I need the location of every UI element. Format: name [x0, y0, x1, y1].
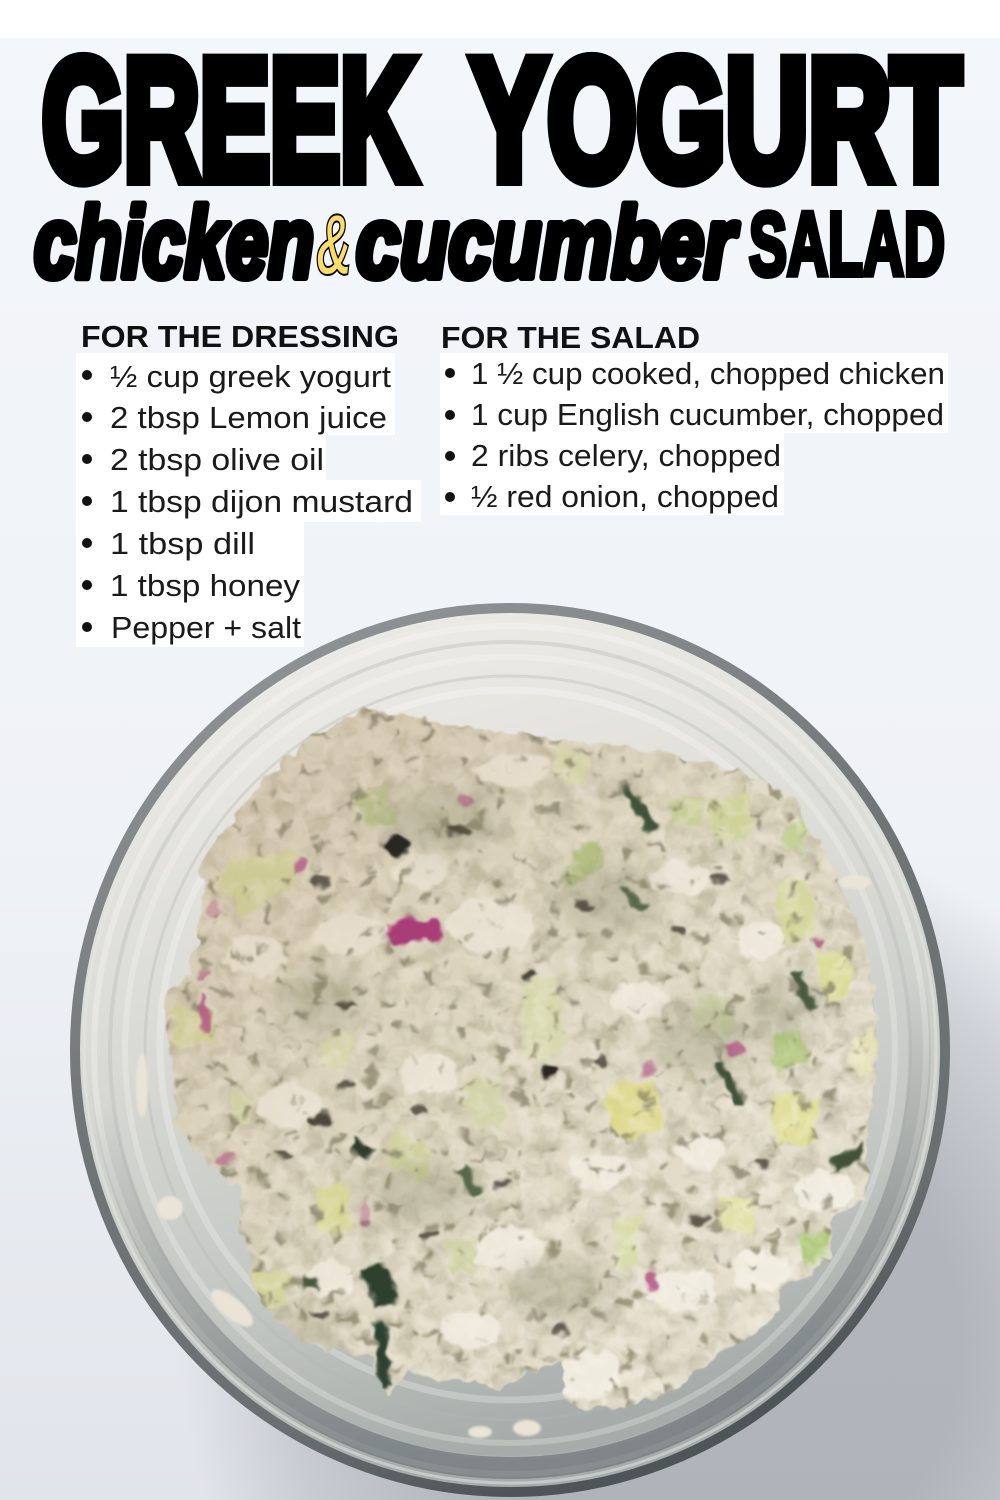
subtitle line: chicken & cucumber salad [34, 187, 945, 299]
crevices [276, 824, 770, 1335]
list: salad items: 1 ½ cup cooked, chopped chicken [471, 356, 945, 391]
script word: cucumber: cucumber [356, 187, 739, 299]
list: salad items: 2 ribs celery, chopped [471, 438, 781, 473]
stray dressing on glass [136, 875, 871, 1438]
ampersand: & [316, 197, 352, 293]
list: dressing items: 2 tbsp Lemon juice [110, 400, 387, 435]
salad mass [150, 700, 890, 1430]
panel: salad ingredients [440, 320, 948, 515]
title word: GREEK: GREEK [42, 24, 416, 216]
title [34, 24, 961, 299]
list: salad items: 1 cup English cucumber, chopped [471, 397, 944, 432]
panel: dressing ingredients [76, 319, 421, 647]
list: dressing items: Pepper + salt [111, 610, 301, 645]
list: dressing items: 1 tbsp dill [110, 526, 255, 561]
list: dressing items: 2 tbsp olive oil [110, 442, 324, 477]
white highlight strips [440, 353, 948, 515]
bowl glass body [72, 604, 948, 1496]
chicken chunks [223, 754, 855, 1399]
list: salad items: ½ red onion, chopped [471, 479, 779, 514]
list: salad items [445, 356, 945, 514]
white highlight strips [76, 353, 421, 647]
list: dressing items [82, 359, 413, 645]
rim [75, 608, 945, 1492]
glass rings [94, 626, 926, 1474]
list: dressing items: 1 tbsp dijon mustard [110, 484, 413, 519]
list: dressing items: 1 tbsp honey [110, 568, 301, 603]
photo: glass bowl of salad [72, 604, 948, 1496]
broad shaded patches [260, 792, 810, 1350]
cucumber and celery pieces [172, 745, 875, 1399]
lower glass band [100, 632, 920, 1468]
red onion [193, 795, 827, 1288]
heading: for the salad: FOR THE SALAD [441, 320, 700, 355]
list: dressing items: ½ cup greek yogurt [110, 359, 391, 394]
heading: for the dressing: FOR THE DRESSING [81, 319, 399, 354]
script word: chicken: chicken [34, 187, 314, 299]
bowl cast shadow [0, 820, 1000, 1500]
dark cucumber skin and shadows [302, 785, 864, 1388]
